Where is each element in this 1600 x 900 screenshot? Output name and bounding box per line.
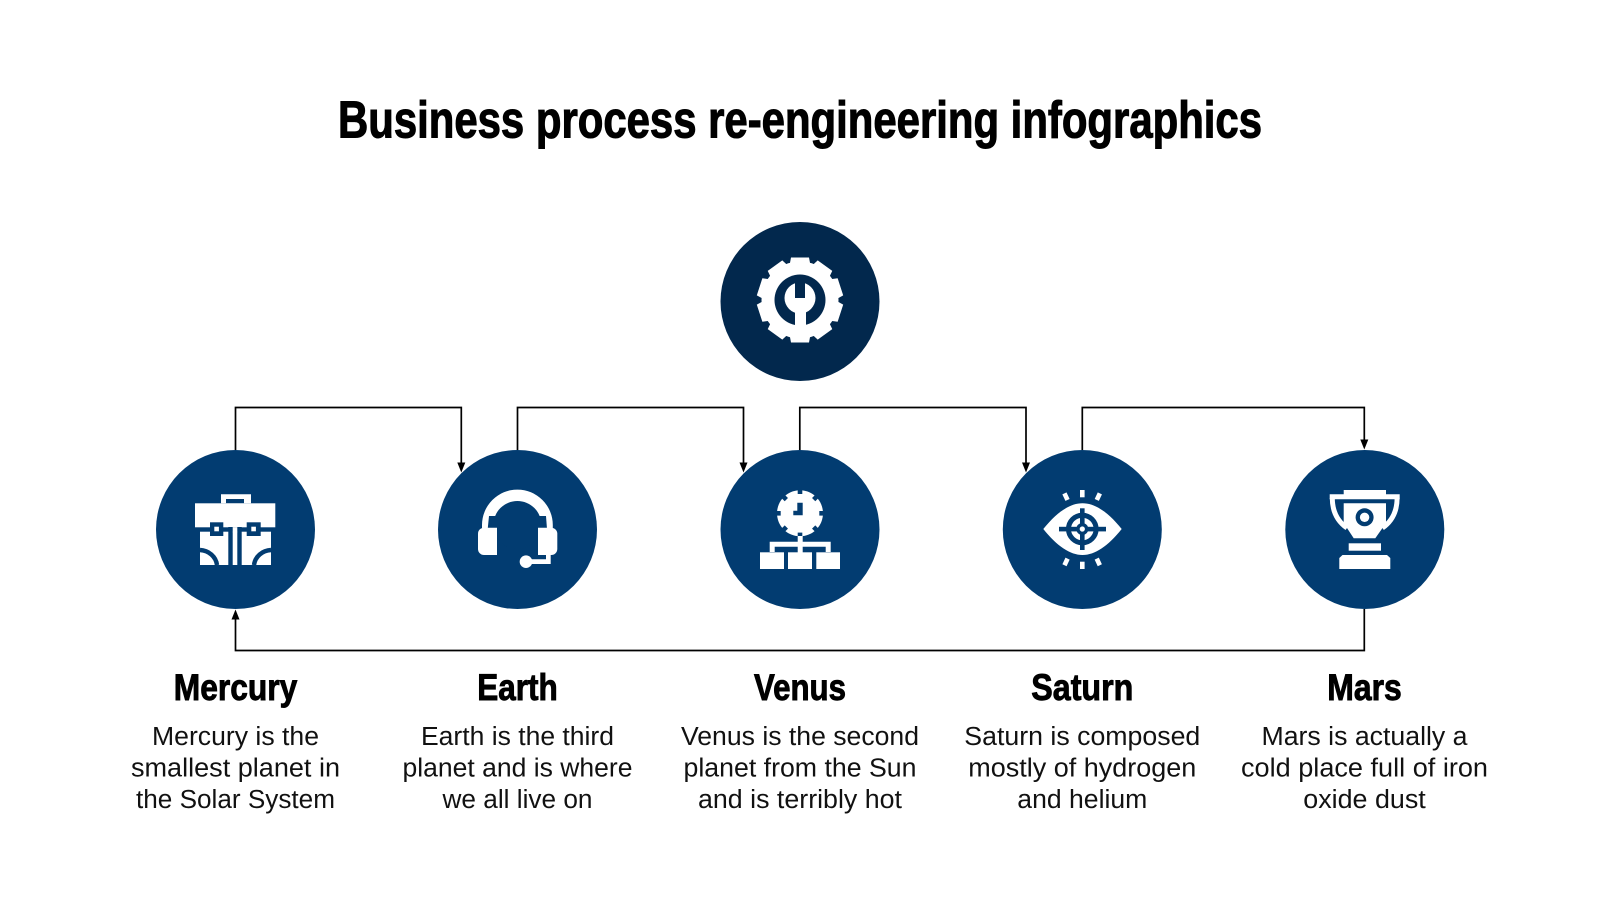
- icon: trophy: [1330, 490, 1400, 569]
- node: Earth: [438, 450, 597, 609]
- text block: Earth: [402, 667, 632, 814]
- text block: Venus: Venus is the second: [681, 723, 919, 751]
- node: Venus: [720, 450, 880, 609]
- text block: Venus: [681, 667, 919, 814]
- node: Saturn: [1003, 450, 1162, 609]
- icon: gear wrench: [756, 258, 844, 342]
- arrow: Earth to Venus: [518, 408, 748, 472]
- text block: Mars: Mars is actually a: [1262, 723, 1468, 751]
- node: Mars: [1285, 450, 1444, 609]
- text block: Saturn: [964, 667, 1200, 814]
- central node: gear and wrench: [720, 222, 880, 381]
- text block: Saturn: mostly of hydrogen: [968, 754, 1196, 782]
- text block: Earth: we all live on: [441, 786, 592, 814]
- arrow: Venus to Saturn: [800, 408, 1030, 472]
- arrow: Mercury to Earth: [236, 408, 465, 472]
- text block: Earth: Earth: [477, 667, 558, 708]
- icon: briefcase: [195, 494, 275, 565]
- text block: Venus: Venus: [754, 667, 846, 708]
- node: Mercury: [156, 450, 315, 609]
- text block: Mercury: [131, 667, 340, 814]
- icon: headset: [478, 490, 557, 568]
- text block: Saturn: Saturn is composed: [964, 723, 1200, 751]
- arrow: Mars back to Mercury: [232, 609, 1364, 650]
- text block: Mars: Mars: [1327, 667, 1402, 708]
- text block: Venus: planet from the Sun: [684, 754, 916, 782]
- title: Business process re-engineering infographics: [338, 92, 1262, 150]
- arrow: Saturn to Mars: [1082, 408, 1368, 450]
- text block: Mercury: Mercury: [174, 667, 298, 708]
- text block: Earth: planet and is where: [402, 754, 632, 782]
- text block: Mercury: the Solar System: [136, 786, 335, 814]
- text block: Saturn: Saturn: [1031, 667, 1133, 708]
- text block: Mars: cold place full of iron: [1241, 754, 1488, 782]
- text block: Earth: Earth is the third: [421, 723, 614, 751]
- icon: clock and process chart: [760, 489, 840, 569]
- text block: Mercury: smallest planet in: [131, 754, 340, 782]
- text block: Saturn: and helium: [1017, 786, 1147, 814]
- text block: Venus: and is terribly hot: [698, 786, 902, 814]
- text block: Mars: oxide dust: [1303, 786, 1426, 814]
- text block: Mars: [1241, 667, 1488, 814]
- icon: eye target: [1043, 490, 1122, 569]
- text block: Mercury: Mercury is the: [152, 723, 319, 751]
